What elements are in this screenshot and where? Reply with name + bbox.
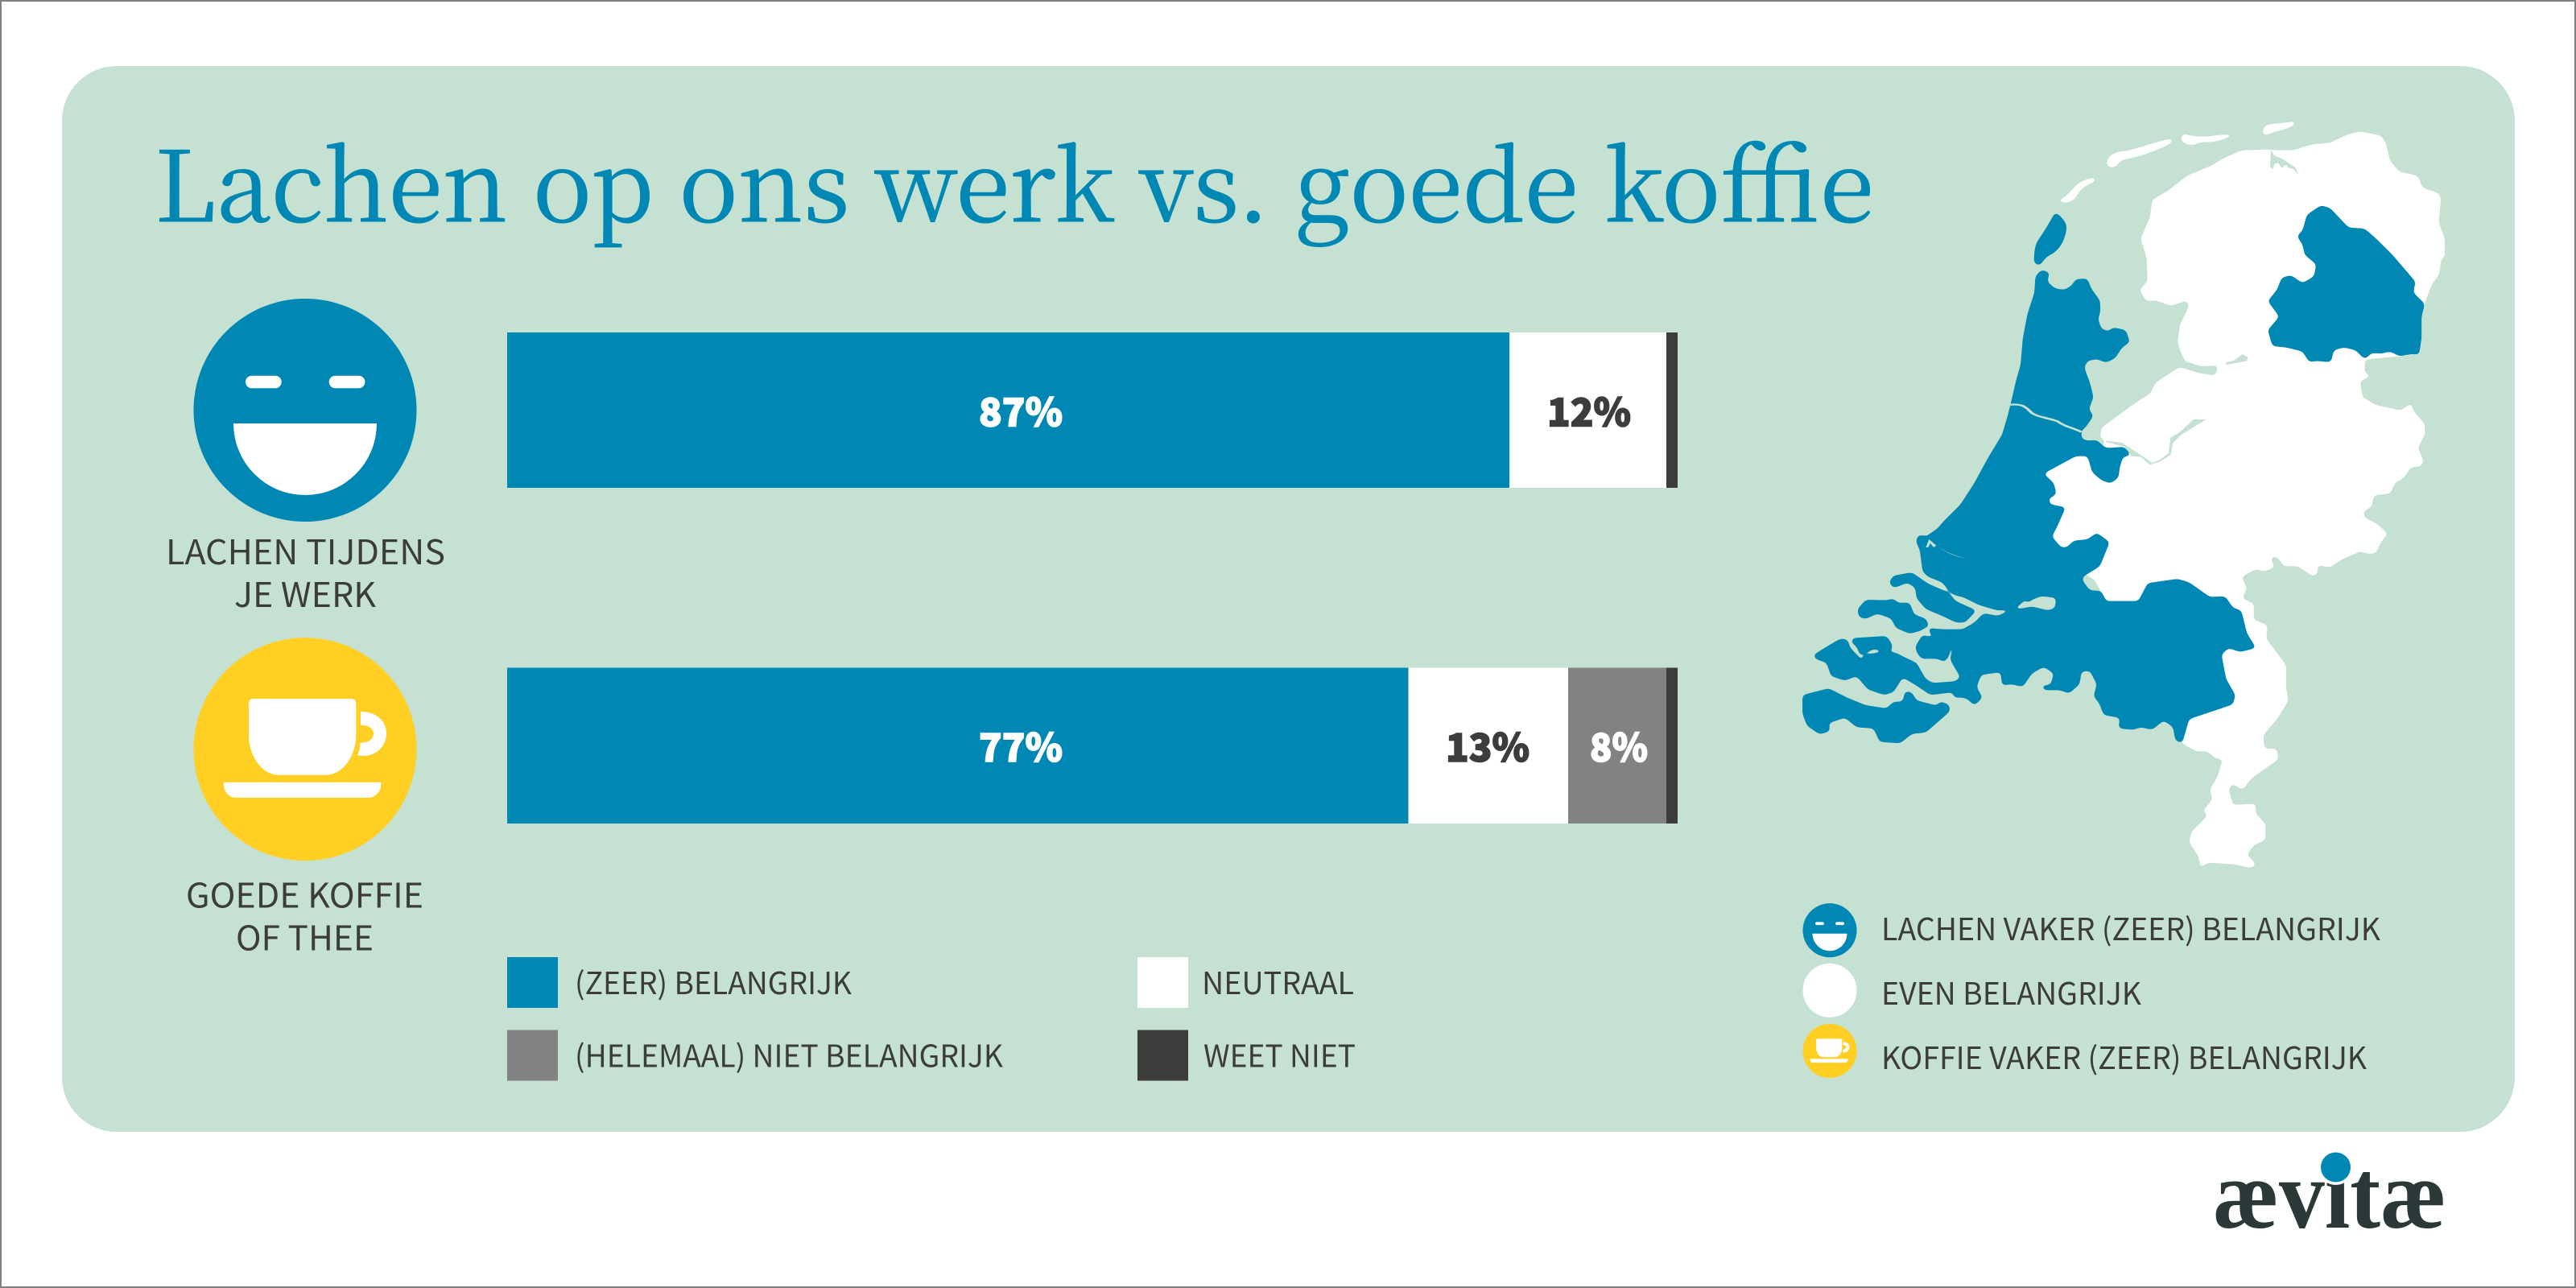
bar chart: lachen tijdens je werk: 12% <box>1547 382 1631 438</box>
panel: green background <box>62 66 2515 1132</box>
bar chart: goede koffie of thee: 77% <box>979 716 1063 773</box>
legend icon: laughing face <box>1802 903 1857 957</box>
bar chart: lachen tijdens je werk <box>507 332 1678 488</box>
map: inland water <box>2106 150 2299 464</box>
bar chart: goede koffie of thee: 8% <box>1590 716 1648 773</box>
label: goede koffie of thee: OF THEE <box>236 912 374 961</box>
bar chart: lachen tijdens je werk: 87% <box>979 382 1063 438</box>
legend text: even belangrijk: EVEN BELANGRIJK <box>1881 969 2141 1013</box>
label: lachen tijdens je werk <box>166 526 445 617</box>
label: goede koffie of thee: GOEDE KOFFIE <box>186 869 423 919</box>
legend icon: coffee cup <box>1802 1024 1857 1078</box>
bar chart: goede koffie of thee <box>507 668 1678 824</box>
bar chart: goede koffie of thee: 13% <box>1446 716 1530 773</box>
legend: bar chart: WEET NIET <box>1203 1032 1356 1076</box>
title: Lachen op ons werk vs. goede koffie <box>155 109 1874 250</box>
legend: bar chart: NEUTRAAL <box>1202 959 1354 1003</box>
map: white provinces and islands <box>2034 121 2445 868</box>
label: lachen tijdens je werk: JE WERK <box>234 568 376 617</box>
map: blue provinces <box>1802 205 2425 743</box>
legend icon: white circle <box>1803 964 1856 1018</box>
logo: aevitae: ævitæ <box>2213 1141 2446 1249</box>
icon: coffee cup <box>193 638 417 861</box>
map: canals <box>1926 404 2082 558</box>
icon: laughing face <box>193 299 417 522</box>
map: Netherlands by province <box>1802 121 2445 868</box>
legend: bar chart <box>507 957 1356 1080</box>
legend: bar chart: (ZEER) BELANGRIJK <box>575 959 852 1003</box>
legend text: lachen vaker: LACHEN VAKER (ZEER) BELANGRIJK <box>1881 905 2380 949</box>
label: lachen tijdens je werk: LACHEN TIJDENS <box>166 526 445 575</box>
legend text: koffie vaker: KOFFIE VAKER (ZEER) BELANGRIJK <box>1881 1034 2367 1078</box>
legend: bar chart: (HELEMAAL) NIET BELANGRIJK <box>575 1032 1003 1076</box>
legend: map <box>1802 903 2380 1078</box>
label: goede koffie of thee <box>186 869 423 961</box>
